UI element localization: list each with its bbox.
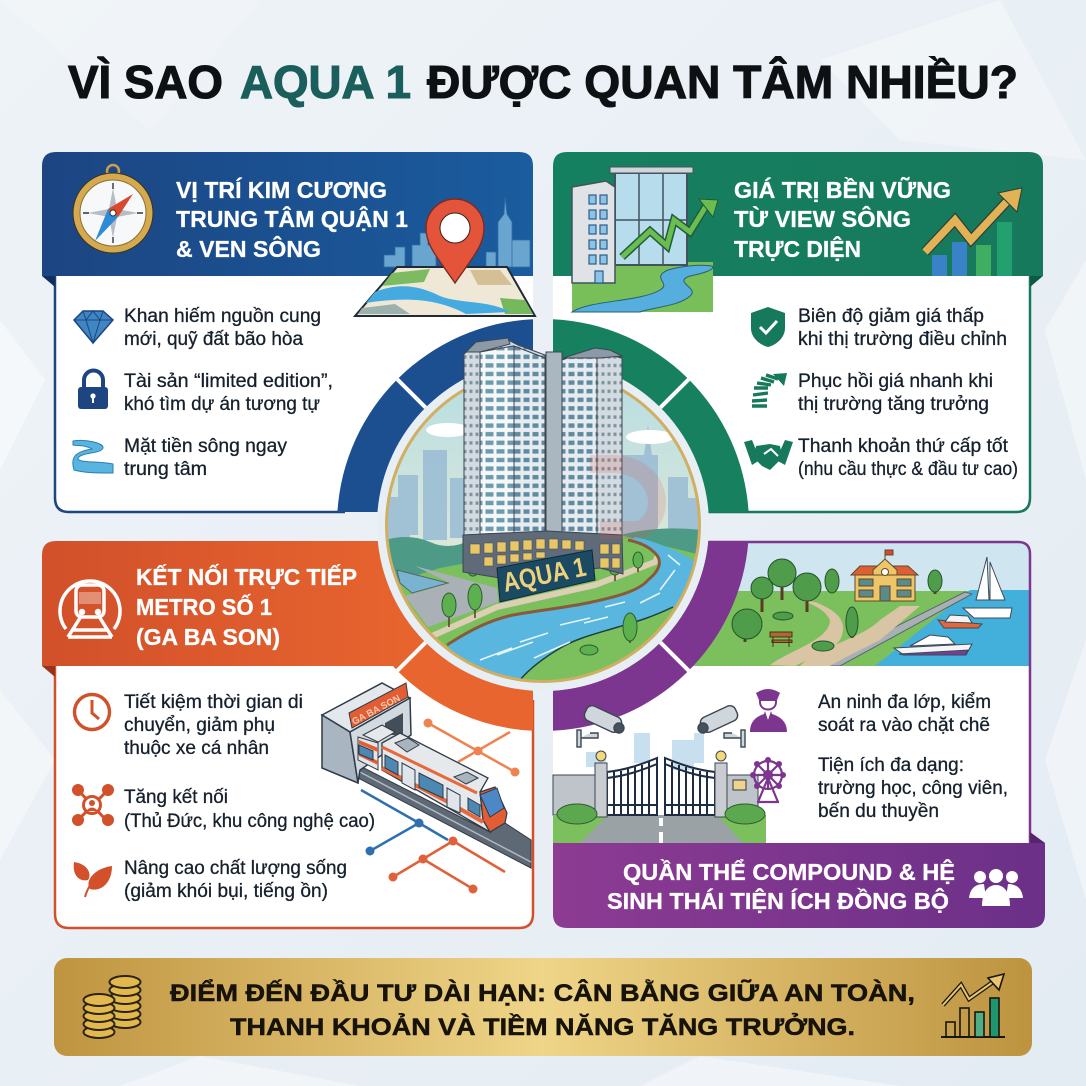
panel header — [42, 541, 426, 671]
panel: giá trị bền vững — [553, 152, 1043, 512]
list item: handshake: (nhu cầu thực & đầu tư cao) — [798, 458, 1018, 480]
list item: river — [73, 435, 287, 480]
central image: Aqua 1 tower — [385, 338, 704, 690]
heading: SINH THÁI TIỆN ÍCH ĐỒNG BỘ — [607, 887, 949, 914]
list item: diamond: Khan hiếm nguồn cung — [124, 305, 321, 327]
panel body — [553, 666, 1030, 843]
heading: TRỰC DIỆN — [734, 235, 861, 262]
heading — [734, 176, 951, 262]
list item: ferris wheel: bến du thuyền — [818, 800, 939, 822]
heading: & VEN SÔNG — [176, 235, 321, 262]
list item: river: trung tâm — [124, 458, 207, 480]
heading: GIÁ TRỊ BỀN VỮNG — [734, 176, 951, 203]
heading: KẾT NỐI TRỰC TIẾP — [136, 563, 357, 590]
river scene disc — [388, 392, 698, 680]
watermark — [590, 464, 657, 530]
central ring segments — [337, 319, 749, 731]
list item: clock: Tiết kiệm thời gian di — [124, 691, 303, 713]
list item: network: (Thủ Đức, khu công nghệ cao) — [124, 810, 375, 832]
bottom banner — [553, 843, 1045, 928]
list item: clock: chuyển, giảm phụ — [124, 714, 275, 736]
panel header — [553, 152, 1043, 276]
list item: clock: thuộc xe cá nhân — [124, 737, 269, 759]
heading: QUẦN THỂ COMPOUND & HỆ — [623, 858, 955, 885]
list item: leaf — [74, 857, 347, 902]
icon: security cameras — [577, 704, 745, 747]
heading: TỪ VIEW SÔNG — [734, 205, 911, 232]
boats — [894, 557, 1012, 655]
illustration: train and tunnel: GA BA SON — [350, 693, 402, 728]
title: ĐƯỢC QUAN TÂM NHIỀU? — [427, 56, 1018, 108]
list item: diamond: mới, quỹ đất bão hòa — [124, 328, 303, 350]
panel body — [55, 276, 533, 512]
icon: coins — [84, 976, 140, 1038]
text — [170, 979, 915, 1041]
heading: METRO SỐ 1 — [136, 593, 272, 620]
illustration: park, school and marina — [630, 543, 1029, 666]
title: AQUA 1 — [240, 56, 411, 108]
list item: diamond — [74, 305, 321, 350]
icon: people — [969, 869, 1023, 906]
title: VÌ SAO — [68, 56, 223, 108]
sign: AQUA 1: AQUA 1 — [500, 552, 589, 598]
text: ĐIỂM ĐẾN ĐẦU TƯ DÀI HẠN: CÂN BẰNG GIỮA AN TOÀN, — [170, 979, 915, 1007]
list item: spring — [752, 370, 993, 415]
icon: growth chart — [941, 974, 1005, 1037]
heading: (GA BA SON) — [136, 624, 280, 650]
list item: river: Mặt tiền sông ngay — [124, 435, 287, 457]
list item: ferris wheel — [750, 754, 1008, 822]
heading: VỊ TRÍ KIM CƯƠNG — [176, 176, 387, 203]
panel: vị trí kim cương — [42, 152, 535, 512]
list item: handshake: Thanh khoản thứ cấp tốt — [798, 435, 1009, 457]
gold ring — [386, 368, 700, 682]
tower body — [463, 338, 623, 578]
list item: network — [74, 786, 375, 832]
panel header — [42, 152, 533, 276]
panel body — [55, 666, 533, 928]
icon: growth chart — [925, 188, 1022, 276]
list item: leaf: (giảm khói bụi, tiếng ồn) — [124, 880, 328, 902]
list item: lock: Tài sản “limited edition”, — [124, 370, 333, 392]
school — [851, 550, 918, 601]
panel frame — [708, 542, 1030, 843]
skyline — [384, 197, 530, 267]
list item: clock — [74, 691, 303, 759]
bench — [770, 632, 792, 647]
closing banner — [54, 958, 1032, 1056]
title — [68, 56, 1018, 108]
list item: spring: Phục hồi giá nhanh khi — [798, 370, 993, 392]
list item: lock: khó tìm dự án tương tự — [124, 393, 320, 415]
heading — [136, 563, 357, 650]
list item: handshake — [744, 435, 1018, 480]
list item: shield: Biên độ giảm giá thấp — [798, 305, 984, 327]
illustration: glass building by river — [572, 167, 718, 312]
trees — [732, 559, 942, 651]
panel body — [553, 276, 1030, 512]
panel: quần thể compound — [553, 541, 1045, 928]
icon: metro train — [60, 581, 120, 637]
illustration: security gate — [553, 733, 766, 843]
list item: network: Tăng kết nối — [124, 786, 228, 808]
heading — [607, 858, 955, 914]
icon: compass — [73, 165, 153, 253]
list item: shield — [751, 305, 1007, 350]
list item: guard: soát ra vào chặt chẽ — [818, 714, 990, 736]
list item: leaf: Nâng cao chất lượng sống — [124, 857, 347, 879]
illustration: train and tunnel — [322, 683, 531, 868]
text: THANH KHOẢN VÀ TIỀM NĂNG TĂNG TRƯỞNG. — [230, 1012, 855, 1041]
illustration: metro network lines — [361, 718, 520, 894]
list item: ferris wheel: Tiện ích đa dạng: — [818, 754, 964, 776]
list item: guard — [750, 689, 991, 736]
list item: shield: khi thị trường điều chỉnh — [798, 328, 1007, 350]
heading — [176, 176, 408, 262]
list item: guard: An ninh đa lớp, kiểm — [818, 691, 991, 713]
panel: kết nối metro — [42, 541, 533, 928]
heading: TRUNG TÂM QUẬN 1 — [176, 205, 408, 232]
list item: spring: thị trường tăng trưởng — [798, 393, 989, 415]
list item: ferris wheel: trường học, công viên, — [818, 777, 1008, 799]
icon: map and pin — [355, 199, 535, 316]
purple ring base — [553, 541, 748, 731]
list item: lock — [78, 370, 333, 415]
